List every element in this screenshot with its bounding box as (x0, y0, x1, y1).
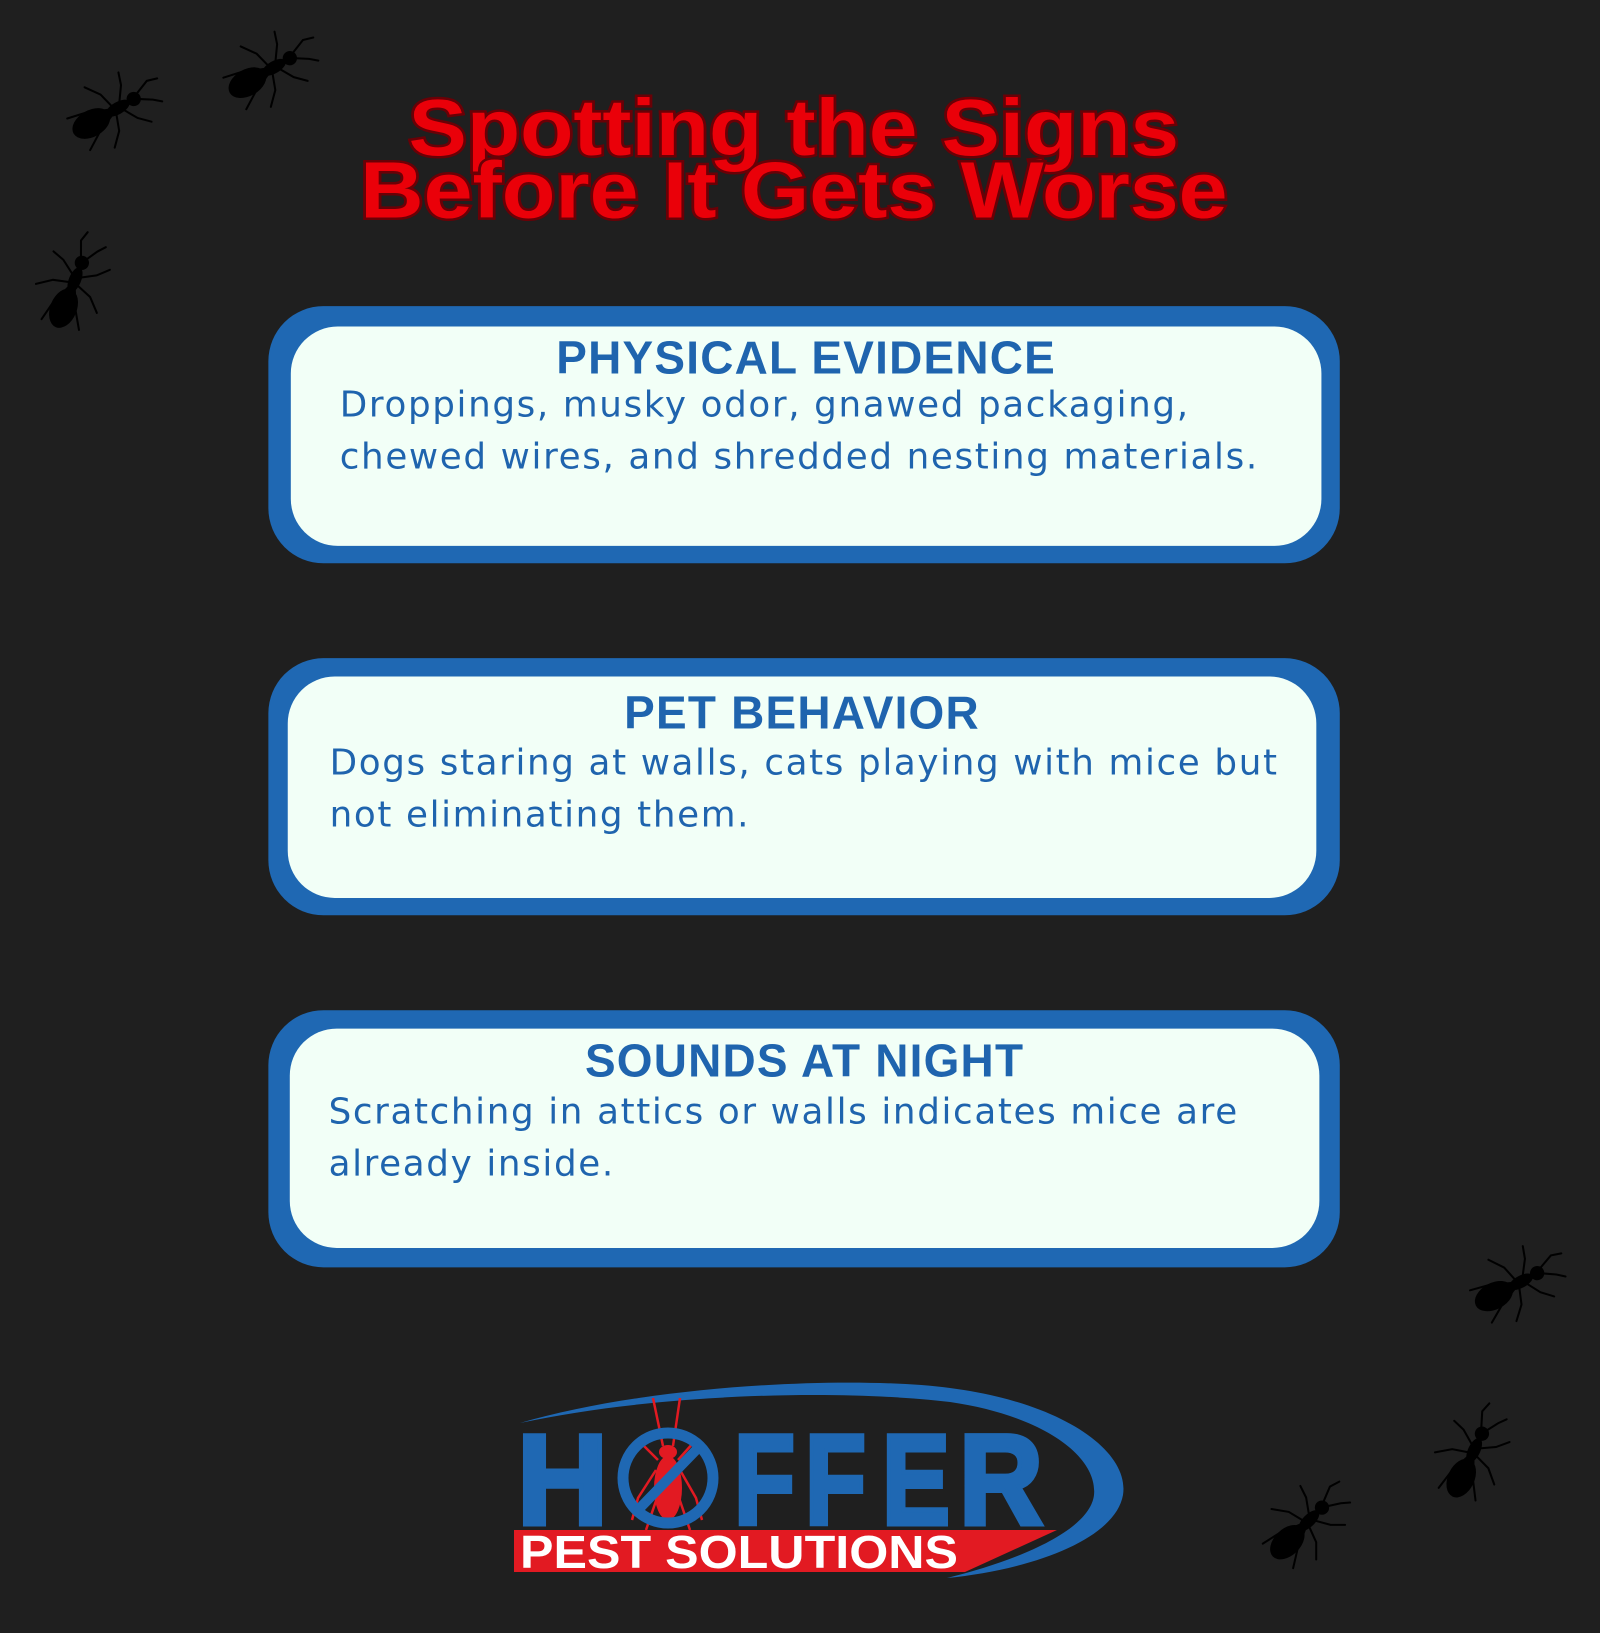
HOFFER: E (882, 1409, 950, 1552)
text: physical evidence: Droppings, musky odor, gnawed packaging, (340, 385, 1190, 426)
title: Spotting the Signs (409, 83, 1179, 172)
heading: sounds at night: SOUNDS AT NIGHT (585, 1035, 1024, 1087)
icon: ant 1 (56, 54, 177, 162)
panel: pet behavior (268, 658, 1340, 915)
text: pet behavior: Dogs staring at walls, cats playing with mice but (330, 743, 1279, 784)
heading: pet behavior: PET BEHAVIOR (624, 687, 980, 739)
text: physical evidence: chewed wires, and shredded nesting materials. (340, 437, 1259, 478)
HOFFER: H (517, 1409, 608, 1552)
text: sounds at night (329, 1092, 1239, 1185)
icon: cockroach no-sign (623, 1398, 713, 1530)
swoosh (520, 1383, 1123, 1578)
HOFFER: F (734, 1409, 795, 1552)
banner (514, 1530, 1057, 1572)
title (360, 83, 1228, 234)
heading: physical evidence: PHYSICAL EVIDENCE (556, 332, 1056, 384)
text: physical evidence (340, 385, 1259, 478)
panel: sounds at night (268, 1010, 1340, 1267)
text: pet behavior (330, 743, 1279, 836)
HOFFER (517, 1409, 1043, 1552)
HOFFER: R (959, 1409, 1043, 1552)
icon: ant 5 (1421, 1391, 1524, 1510)
logo: Hoffer Pest Solutions: PEST SOLUTIONS (520, 1526, 958, 1578)
HOFFER: F (805, 1409, 866, 1552)
text: sounds at night: already inside. (329, 1144, 615, 1185)
icon: ant 4 (1460, 1228, 1580, 1335)
logo: Hoffer Pest Solutions (514, 1382, 1124, 1578)
icon: ant 6 (1248, 1461, 1367, 1580)
text: pet behavior: not eliminating them. (330, 795, 750, 836)
text: sounds at night: Scratching in attics or walls indicates mice are (329, 1092, 1239, 1133)
panel: physical evidence (268, 306, 1340, 563)
title: Before It Gets Worse (360, 145, 1228, 234)
icon: ant 3 (24, 221, 124, 339)
icon: ant 2 (212, 13, 333, 121)
